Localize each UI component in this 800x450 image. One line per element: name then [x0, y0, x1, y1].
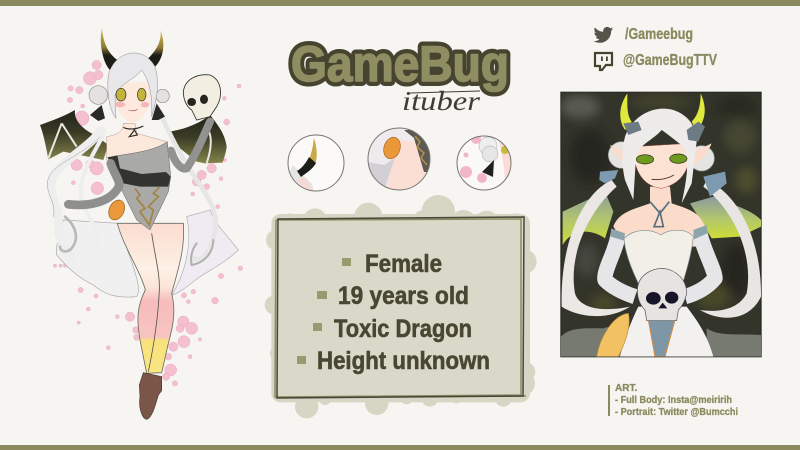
- right glove arm: [685, 233, 715, 297]
- skull: [637, 268, 687, 321]
- left glove arm: [605, 233, 635, 297]
- right glove arm: [171, 122, 210, 169]
- hair crown: [622, 109, 697, 203]
- icon: twitter: [594, 27, 613, 43]
- long hair: [47, 120, 216, 265]
- credits heading: ART.: [615, 383, 637, 394]
- bullet: female: [342, 258, 351, 266]
- detail circle: hair and flowers: [457, 134, 512, 190]
- text: height: Height unknown: [317, 347, 490, 375]
- logo subtitle: ituber: [402, 86, 481, 116]
- eyes: [636, 154, 687, 164]
- portrait frame background: [561, 92, 761, 357]
- blue corset lacing: [648, 320, 675, 357]
- dress: [116, 142, 171, 230]
- hair buns: [608, 142, 714, 171]
- left wing: [563, 192, 613, 245]
- nose and mouth: [652, 175, 674, 180]
- logo: GameBug: [291, 36, 509, 116]
- bullet: height: [297, 356, 306, 364]
- dress sash: [107, 155, 171, 187]
- inner leg line: [148, 233, 159, 372]
- portrait card illustration: [560, 92, 761, 357]
- bat wing left: [40, 110, 108, 160]
- skirt right: [172, 210, 238, 295]
- right horn: [692, 94, 705, 126]
- face: [633, 143, 690, 188]
- panel card: [277, 220, 523, 397]
- neck and shoulders: [613, 187, 705, 247]
- bullet: age: [317, 291, 327, 299]
- hair ribbons: [599, 170, 727, 197]
- wing bones: [48, 123, 211, 163]
- credit: portrait: - Portrait: Twitter @Bumcchi: [615, 407, 738, 418]
- left horn: [101, 28, 117, 70]
- glove bands: [611, 225, 707, 241]
- side hair buns: [89, 86, 169, 104]
- detail circle: horn: [286, 135, 344, 195]
- orange shield: [597, 313, 629, 357]
- boot: [139, 373, 162, 419]
- rocks: [561, 327, 761, 357]
- left hair tail: [562, 180, 630, 316]
- right horn: [147, 31, 163, 68]
- skull held up: [183, 75, 221, 120]
- credits accent bar: [608, 385, 610, 416]
- olive frame: [275, 219, 526, 397]
- full-body character illustration: [40, 28, 243, 419]
- hair ribbons: [90, 103, 165, 121]
- head and face: [108, 53, 157, 122]
- detail circle: coin: [368, 128, 432, 192]
- white dress: [624, 230, 693, 287]
- logo wordmark outline: GameBug: [291, 36, 509, 92]
- skirt left: [56, 220, 138, 297]
- cherry blossoms behind character: [53, 60, 243, 386]
- right wing: [690, 197, 761, 238]
- bullet: species: [313, 323, 322, 331]
- legs: [117, 223, 184, 373]
- icon: twitch: [595, 53, 612, 70]
- orange coin charm: [106, 198, 128, 222]
- subtitle flourish: [410, 91, 480, 93]
- horn base right: [687, 122, 705, 142]
- skirt: [620, 307, 713, 357]
- text: twitch handle: @GameBugTTV: [623, 52, 718, 69]
- text: twitter handle: /Gameebug: [625, 26, 693, 43]
- top border bar: [0, 0, 800, 6]
- text: species: Toxic Dragon: [334, 315, 472, 343]
- info panel: [265, 195, 537, 418]
- left glove arm: [68, 163, 119, 205]
- credit: full body: - Full Body: Insta@meiririh: [615, 395, 732, 406]
- corset lacing: [135, 187, 160, 225]
- text: age: 19 years old: [338, 282, 469, 310]
- forest texture: [560, 93, 758, 313]
- choker: [123, 126, 143, 137]
- art credits: [608, 383, 738, 418]
- horn base left: [623, 122, 642, 135]
- elf ears: [610, 143, 712, 165]
- bottom border bar: [0, 445, 800, 450]
- necklace: [650, 202, 669, 227]
- text: female: Female: [365, 250, 442, 278]
- panel paint blob: [265, 195, 537, 418]
- bat wing right: [168, 115, 227, 163]
- torso skin: [107, 123, 168, 160]
- logo wordmark fill: GameBug: [291, 36, 509, 92]
- dark frame: [277, 217, 524, 398]
- right hair tail: [700, 180, 761, 318]
- left horn: [620, 93, 632, 130]
